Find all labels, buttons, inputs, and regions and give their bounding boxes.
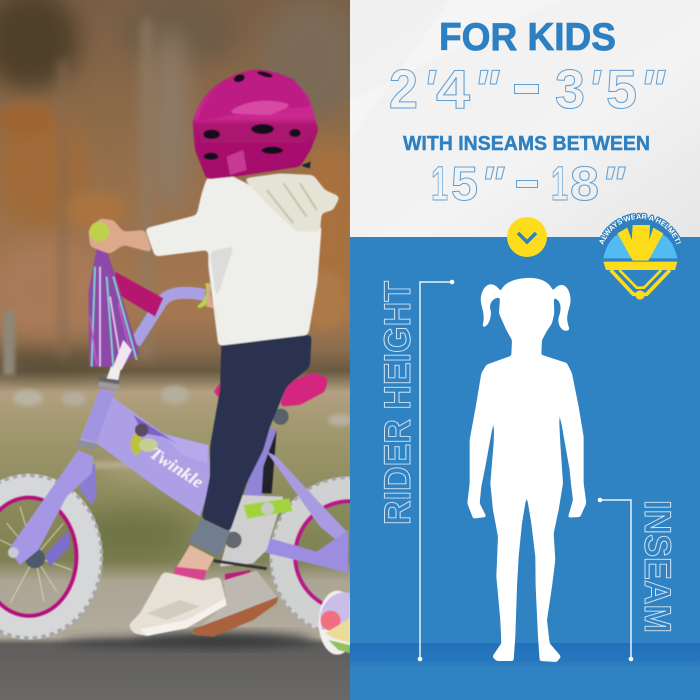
icon: always wear a helmet badge [599,212,682,300]
rider height range: 4 [436,58,470,120]
inseam bracket [598,498,633,661]
rider height range: ' [588,58,602,120]
handlebar and streamer tassels [88,248,214,370]
floor band [350,643,700,667]
front bicycle wheel [0,475,102,638]
inseam range: 8 [570,158,599,211]
inseam range: 5 [451,158,478,211]
heading: for kids: FOR KIDS [439,16,616,59]
inseam range: 1 [551,158,568,211]
inseam range: " [480,158,505,211]
inseam range: " [601,158,626,211]
inseam label: INSEAM [637,500,678,633]
inseam range [431,158,626,211]
rider height range: " [639,58,666,120]
hand and forearm [88,218,153,254]
jeans [188,333,312,557]
rider height range: 2 [389,58,418,120]
bicycle frame [8,357,348,573]
rider height range: 5 [606,58,637,120]
leg, sock and front shoe [128,545,227,636]
rider height range: ' [423,58,437,120]
inseam range: 1 [431,158,448,211]
rear bicycle wheel [268,475,350,631]
bicycle seat [214,372,328,425]
chain, crank and pedal [213,495,292,569]
child silhouette [468,278,586,662]
subheading: with inseams between: WITH INSEAMS BETWEEN [403,132,650,155]
rider height label: RIDER HEIGHT [377,281,418,525]
icon: always wear a helmet badge: ALWAYS WEAR A HELMET! [599,212,682,245]
rider height range [389,58,666,120]
white sweater [145,172,322,346]
snail wheel disc [318,590,350,656]
panel: blue rider diagram [350,237,700,700]
photo background: autumn trees, grass, gravel and road [0,0,365,700]
frame decal: brand name: Twinkle [146,443,207,492]
rear shoe and sock [193,570,278,637]
icon: yellow chevron button [507,217,547,257]
rider height bracket [418,280,454,661]
panel: height heading background [350,0,700,238]
rider height range: " [473,58,500,120]
frame decal: fairy [131,415,177,455]
pink helmet [193,69,318,179]
rider height range: 3 [555,58,585,120]
blonde hair [243,173,340,232]
panel: photo of child on bike [0,0,350,700]
